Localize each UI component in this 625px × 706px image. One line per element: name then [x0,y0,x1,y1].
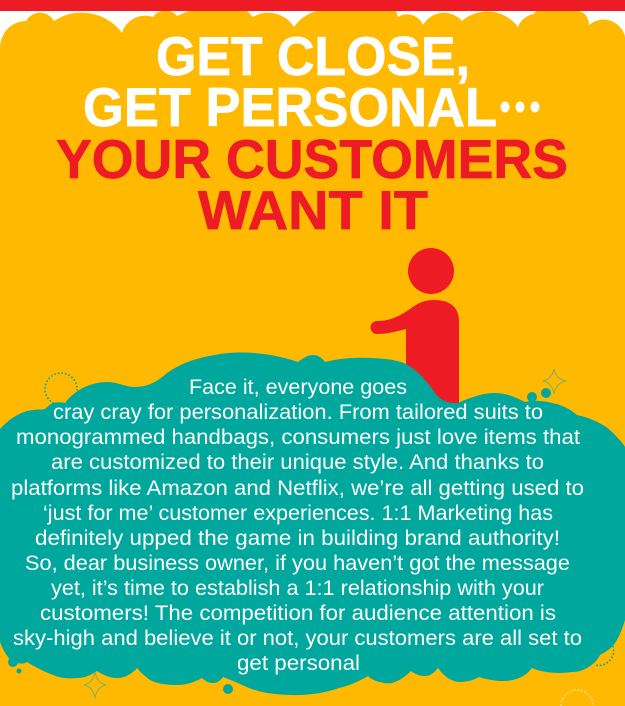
icon: dotted arc bottom right [595,646,614,665]
teal dots bottom left [8,657,233,694]
icon: sparkle bottom left [84,672,106,698]
body text: ‘just for me’ customer experiences. 1:1 Marketing has [43,502,553,525]
body text: sky-high and believe it or not, your customers are all set to [13,627,582,650]
panel: teal cloud [0,353,625,695]
title: GET CLOSE, [156,25,470,87]
body text: yet, it’s time to establish a 1:1 relationship with your [51,577,544,600]
icon: pale dotted circle bottom right [561,690,593,706]
title ellipsis dots [500,102,540,112]
body text: platforms like Amazon and Netflix, we’re all getting used to [11,477,584,500]
title: GET PERSONAL [83,76,497,138]
body text: Face it, everyone goes [189,376,407,399]
body text: are customized to their unique style. And thanks to [51,451,544,474]
title: YOUR CUSTOMERS [56,128,568,190]
icon: red person figure [371,248,459,410]
body text: definitely upped the game in building brand authority! [35,527,560,550]
icon: sparkle top right [543,369,566,394]
top red bar [0,0,625,11]
body text: get personal [237,652,360,675]
icon: dotted circle top left [45,373,77,405]
body text [11,376,584,675]
body text: So, dear business owner, if you haven’t got the message [25,552,570,575]
body text: cray cray for personalization. From tailored suits to [53,401,543,424]
body text: monogrammed handbags, consumers just love items that [16,426,580,449]
body text: customers! The competition for audience attention is [40,602,556,625]
title [56,25,568,241]
title: WANT IT [198,179,428,241]
teal dots top right [527,388,551,402]
